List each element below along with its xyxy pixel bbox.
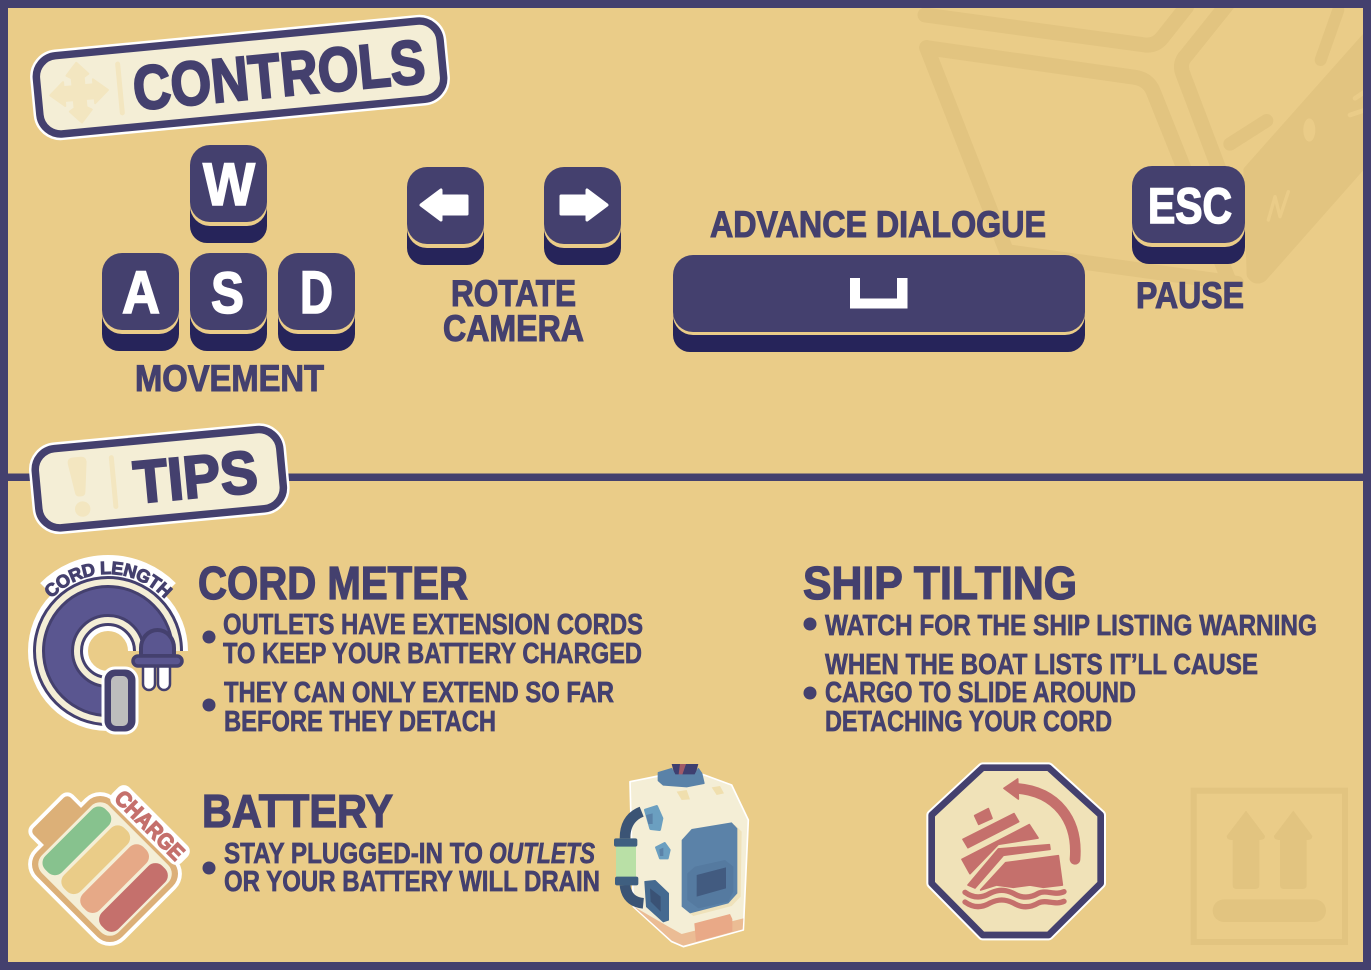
text: ship tilting tips: WHEN THE BOAT LISTS IT’LL CAUSE [825, 649, 1258, 681]
key S [190, 253, 267, 351]
text: battery tip: STAY PLUGGED-IN TO [224, 838, 483, 870]
key esc [1132, 166, 1245, 264]
illustration: battery backpack [614, 764, 748, 947]
watermark: ship outline [925, 0, 1365, 283]
label: advance dialogue: ADVANCE DIALOGUE [710, 204, 1046, 245]
key left arrow [407, 167, 484, 265]
key S: S [211, 261, 244, 326]
heading: battery: BATTERY [202, 785, 393, 837]
tips heading badge: TIPS [131, 438, 260, 516]
controls heading badge [34, 19, 446, 136]
controls heading badge: CONTROLS [130, 28, 428, 124]
label: movement: MOVEMENT [135, 358, 324, 399]
heading: ship tilting: SHIP TILTING [803, 557, 1077, 609]
key right arrow [544, 167, 621, 265]
text: ship tilting tips: DETACHING YOUR CORD [825, 706, 1112, 738]
text: cord meter tips: BEFORE THEY DETACH [224, 706, 496, 738]
key D: D [300, 259, 333, 326]
key A [102, 253, 179, 351]
key D [278, 253, 355, 351]
icon: cord length [28, 555, 188, 734]
icon: battery charge [8, 772, 193, 955]
text: battery tip [202, 838, 600, 898]
text: battery tip: OR YOUR BATTERY WILL DRAIN [224, 866, 600, 898]
text: cord meter tips: TO KEEP YOUR BATTERY CHARGED [223, 638, 642, 670]
icon: ship listing warning [932, 768, 1101, 935]
watermark: this way up box [1194, 791, 1345, 942]
tips heading badge [33, 428, 285, 530]
label: rotate camera: CAMERA [443, 308, 584, 349]
text: ship tilting tips [804, 610, 1317, 738]
text: cord meter tips: THEY CAN ONLY EXTEND SO FAR [224, 677, 614, 709]
text: ship tilting tips: CARGO TO SLIDE AROUND [825, 677, 1136, 709]
label: pause: PAUSE [1136, 275, 1244, 316]
key space bar [673, 255, 1085, 352]
key A: A [122, 259, 160, 326]
text: cord meter tips [202, 609, 643, 738]
key W [190, 145, 267, 243]
section divider [8, 474, 1363, 481]
text: cord meter tips: OUTLETS HAVE EXTENSION CORDS [223, 609, 643, 641]
icon: cord length: CORD LENGTH [45, 561, 174, 599]
label: rotate camera [443, 273, 584, 349]
heading: cord meter: CORD METER [198, 557, 468, 609]
key esc: ESC [1148, 178, 1232, 234]
key W: W [203, 151, 255, 218]
text: battery tip: OUTLETS [489, 838, 596, 870]
icon: battery charge: CHARGE [110, 785, 190, 865]
label: rotate camera: ROTATE [451, 273, 576, 314]
